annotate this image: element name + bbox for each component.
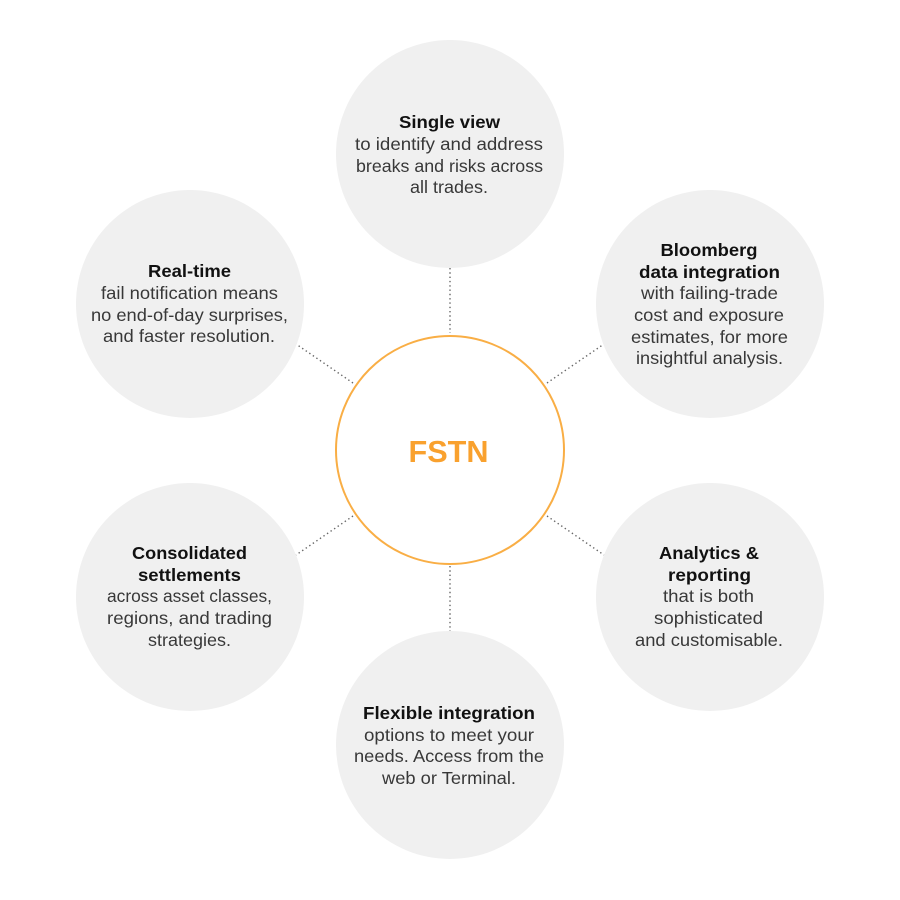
connector: upper left <box>296 344 353 383</box>
panel: analytics and reporting: that is both <box>663 586 754 606</box>
connector: upper right <box>547 344 604 383</box>
panel: flexible integration: Flexible integration <box>363 703 535 723</box>
panel: analytics and reporting: reporting <box>668 565 751 585</box>
panel: bloomberg data integration: estimates, for more <box>631 327 788 347</box>
panel: single view: all trades. <box>410 177 488 197</box>
panel: real-time: Real-time <box>148 261 231 281</box>
panel: bloomberg data integration <box>596 190 824 418</box>
panel: flexible integration <box>336 631 564 859</box>
panel: analytics and reporting: Analytics & <box>659 543 759 563</box>
panel: bloomberg data integration: Bloomberg <box>660 240 758 260</box>
panel: flexible integration: needs. Access from the <box>354 746 544 766</box>
hub: FSTN: FSTN <box>408 434 488 469</box>
panel: consolidated settlements: regions, and trading <box>107 608 272 628</box>
panel: bloomberg data integration: insightful analysis. <box>636 348 783 368</box>
panel: flexible integration: web or Terminal. <box>381 768 516 788</box>
panel: analytics and reporting: and customisable. <box>635 630 783 650</box>
panel: single view <box>336 40 564 268</box>
hub: FSTN <box>336 336 564 564</box>
panel: analytics and reporting <box>596 483 824 711</box>
connector: top <box>449 268 451 333</box>
panel: consolidated settlements <box>76 483 304 711</box>
panel: flexible integration: options to meet your <box>364 725 534 745</box>
connector: lower right <box>547 516 604 555</box>
panel: bloomberg data integration: cost and exposure <box>634 305 784 325</box>
panel: real-time: no end-of-day surprises, <box>91 305 288 325</box>
connector: bottom <box>449 566 451 631</box>
connector: lower left <box>296 516 353 555</box>
panel: real-time: fail notification means <box>101 283 278 303</box>
panel: real-time: and faster resolution. <box>103 326 275 346</box>
panel: single view: breaks and risks across <box>356 156 543 176</box>
panel: single view: to identify and address <box>355 134 543 154</box>
panel: consolidated settlements: settlements <box>138 565 241 585</box>
panel: real-time <box>76 190 304 418</box>
panel: analytics and reporting: sophisticated <box>654 608 763 628</box>
panel: bloomberg data integration: with failing-trade <box>640 283 778 303</box>
panel: bloomberg data integration: data integration <box>639 262 780 282</box>
panel: single view: Single view <box>399 112 500 132</box>
panel: consolidated settlements: across asset classes, <box>107 586 272 606</box>
panel: consolidated settlements: Consolidated <box>132 543 247 563</box>
panel: consolidated settlements: strategies. <box>148 630 231 650</box>
